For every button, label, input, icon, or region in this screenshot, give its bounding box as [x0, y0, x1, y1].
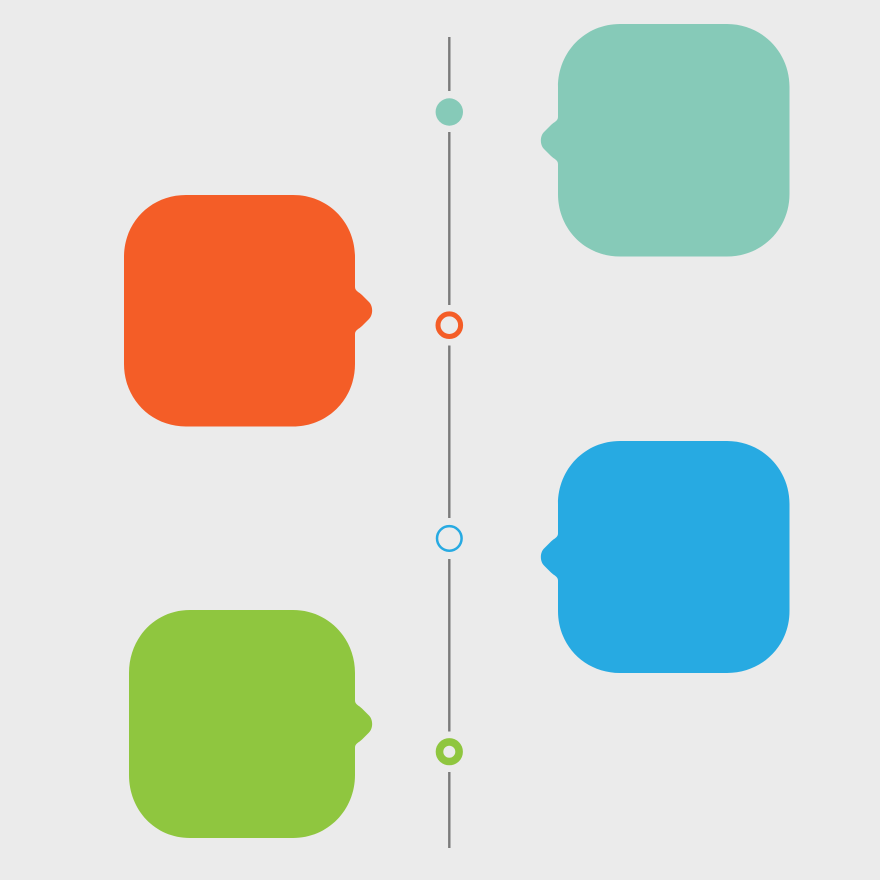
panel: orange speech bubble — [124, 195, 372, 426]
panel: blue speech bubble — [541, 441, 790, 673]
vertical timeline line — [448, 37, 450, 848]
marker: orange ring — [438, 314, 461, 337]
marker: green ring with thick band — [440, 742, 459, 762]
marker: blue thin ring — [437, 526, 462, 551]
panel: green speech bubble — [129, 610, 372, 838]
panel: teal speech bubble — [541, 24, 790, 256]
marker: teal filled dot — [436, 98, 463, 126]
